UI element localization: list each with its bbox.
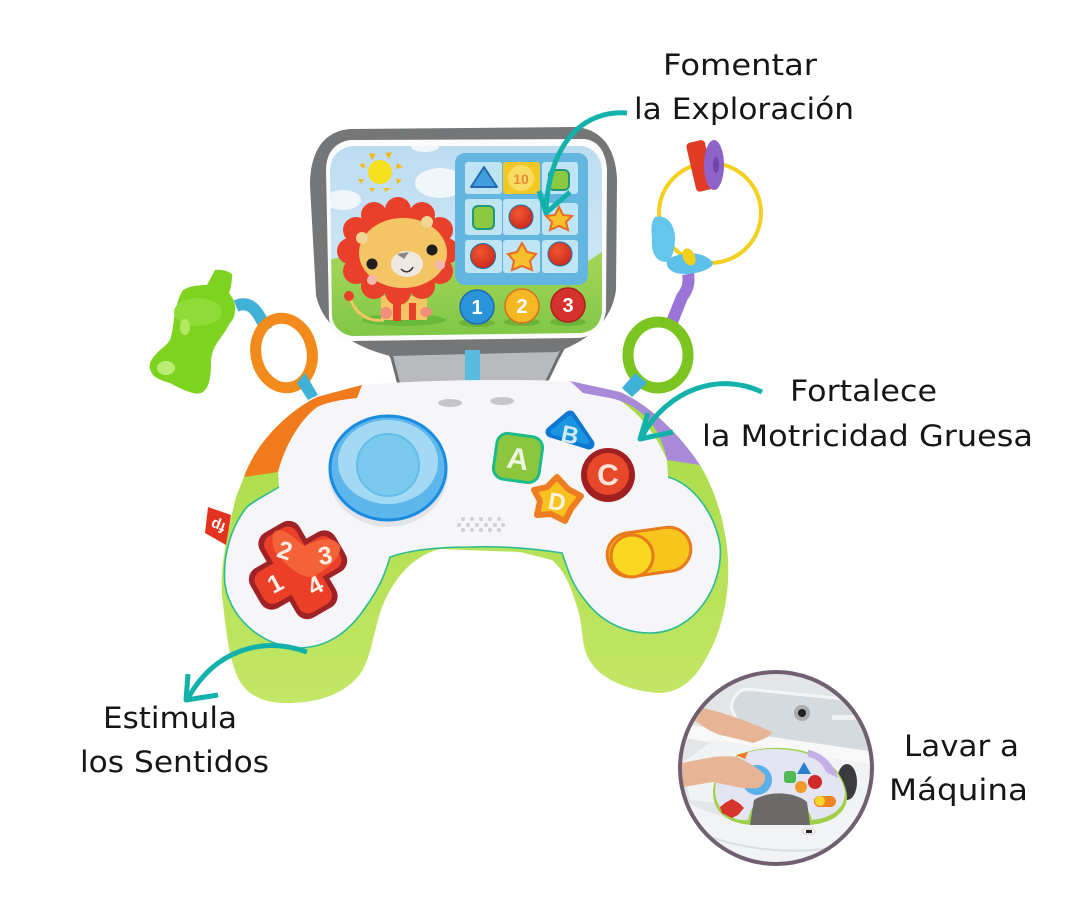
center strap: [465, 350, 480, 384]
label: fortalece la motricidad gruesa: Fortalece: [790, 374, 937, 408]
mini pillow: [713, 748, 847, 825]
label: estimula los sentidos: [80, 701, 269, 779]
red tag: [205, 507, 231, 545]
tablet mat: [310, 127, 617, 385]
button D: [534, 477, 581, 521]
label: fortalece la motricidad gruesa: [702, 374, 1033, 453]
button A: [492, 432, 544, 484]
mesh neck: [385, 345, 565, 385]
toy: yellow ring with keys and green ring: [622, 139, 761, 397]
label: fomentar la exploración: [634, 48, 854, 126]
number buttons: 1: [471, 297, 483, 319]
arrow: sentidos: [186, 646, 307, 700]
button A: A: [505, 442, 531, 477]
top buttons: [438, 399, 462, 407]
tablet screen: [325, 142, 604, 342]
toggle switch: [604, 524, 694, 580]
game panel: 10: [513, 171, 529, 187]
label: fortalece la motricidad gruesa: la Motricidad Gruesa: [702, 419, 1033, 453]
plush controller pillow: [205, 380, 728, 703]
photo: pillow in washing machine: [676, 668, 876, 870]
button C: [581, 448, 635, 502]
button B: [551, 416, 589, 450]
label: lavar a máquina: Lavar a: [904, 729, 1019, 763]
d-pad: 3: [316, 541, 334, 571]
label: lavar a máquina: [889, 729, 1028, 807]
number buttons: 3: [562, 295, 574, 317]
d-pad: 4: [303, 570, 328, 602]
button C: C: [597, 459, 619, 492]
tub: [683, 740, 872, 818]
tablet frame: [310, 127, 617, 356]
lion: [337, 197, 459, 326]
sun: [358, 152, 403, 192]
button D: D: [546, 488, 568, 517]
red tag: fp: [209, 515, 228, 536]
hands: [693, 707, 772, 743]
speaker dots: [457, 517, 505, 532]
label: estimula los sentidos: los Sentidos: [80, 745, 269, 779]
number buttons: 2: [516, 296, 528, 318]
arrow: exploración: [539, 113, 627, 213]
orange shoulder: [244, 385, 362, 477]
d-pad: 2: [274, 535, 296, 566]
purple shoulder: [570, 381, 700, 465]
label: lavar a máquina: Máquina: [889, 773, 1028, 807]
green body: [222, 381, 728, 703]
number buttons: [459, 288, 586, 327]
joystick: [328, 416, 448, 527]
label: fomentar la exploración: la Exploración: [634, 92, 854, 126]
button B: B: [559, 420, 581, 450]
label: fomentar la exploración: Fomentar: [663, 48, 817, 82]
game panel: [455, 153, 588, 285]
arrow: motricidad: [640, 384, 762, 439]
d-pad: [244, 516, 352, 624]
label: estimula los sentidos: Estimula: [103, 701, 237, 735]
white face: [224, 380, 720, 648]
d-pad: 1: [263, 568, 288, 600]
toy: green teether and orange ring: [150, 270, 319, 400]
